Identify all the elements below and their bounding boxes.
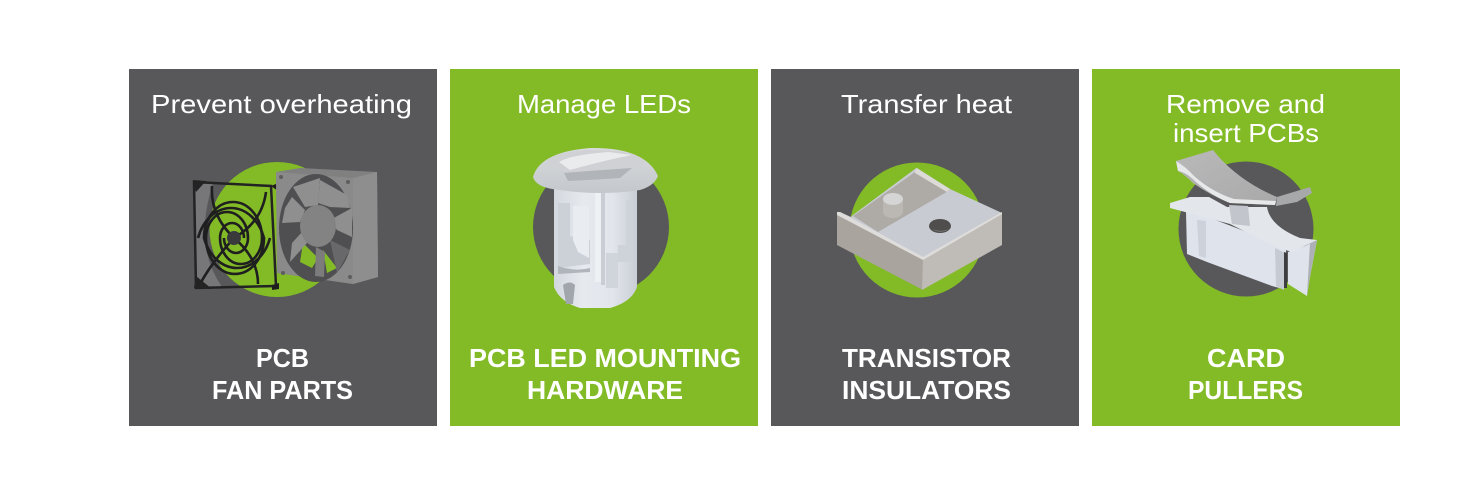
label: PCB LED mounting hardware: PCB LED MOUNTING	[469, 343, 741, 373]
label: transistor insulators: TRANSISTOR	[842, 343, 1011, 373]
icon: green circle behind fan	[210, 162, 344, 297]
label: transistor insulators: INSULATORS	[842, 375, 1011, 405]
heading: transfer heat: Transfer heat	[841, 89, 1013, 119]
heading: remove and insert PCBs	[1166, 89, 1325, 148]
label: PCB LED mounting hardware	[469, 343, 741, 405]
label: card pullers: PULLERS	[1188, 375, 1303, 405]
panel: card pullers	[1092, 69, 1400, 426]
label: transistor insulators	[842, 343, 1011, 405]
heading: remove and insert PCBs: Remove and	[1166, 89, 1325, 119]
heading: remove and insert PCBs: insert PCBs	[1173, 118, 1319, 148]
panel: PCB LED mounting hardware	[450, 69, 758, 426]
label: PCB fan parts: FAN PARTS	[212, 375, 353, 405]
heading: prevent overheating: Prevent overheating	[151, 89, 412, 119]
label: PCB fan parts	[212, 343, 353, 405]
label: PCB LED mounting hardware: HARDWARE	[527, 375, 683, 405]
icon: green circle behind insulator	[850, 162, 984, 298]
heading: manage LEDs: Manage LEDs	[517, 89, 691, 119]
label: card pullers	[1188, 343, 1303, 405]
label: card pullers: CARD	[1207, 343, 1285, 373]
icon: card puller	[1170, 150, 1317, 296]
panel: transistor insulators	[771, 69, 1079, 426]
icon: fan housing and blades	[276, 168, 378, 284]
panel: PCB fan parts	[129, 69, 437, 426]
icon: dark circle behind LED mount	[533, 159, 669, 295]
icon: transistor insulator	[837, 168, 1002, 290]
icon: dark circle behind card puller	[1178, 162, 1314, 296]
icon: fan guard grill	[193, 180, 279, 290]
label: PCB fan parts: PCB	[256, 343, 309, 373]
icon: LED mount	[533, 148, 658, 308]
